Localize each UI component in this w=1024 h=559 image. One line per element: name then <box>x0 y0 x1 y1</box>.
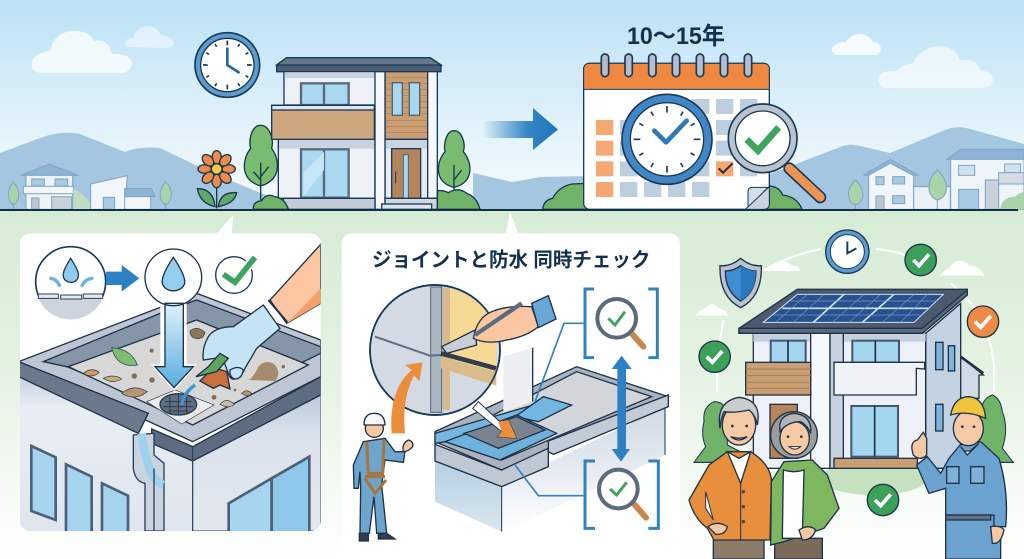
dashed ring <box>717 249 994 490</box>
headline: period: 10〜15年 <box>627 23 725 50</box>
icon: green check <box>216 257 255 293</box>
sky background <box>0 0 1024 211</box>
roof building <box>435 348 668 532</box>
debris on roof <box>83 328 285 407</box>
arrow: detail to roof <box>473 402 517 438</box>
icon: flower <box>197 151 237 208</box>
clouds: upper left <box>32 26 174 73</box>
arm and glove <box>196 244 321 389</box>
building windows <box>31 446 309 535</box>
drain <box>147 385 214 424</box>
magnifier bracket upper <box>585 289 657 358</box>
calendar grid <box>596 120 733 197</box>
arrow: two-way check <box>612 356 632 462</box>
house main <box>272 58 441 209</box>
icon: magnifier <box>728 104 820 197</box>
person: older man <box>689 397 771 559</box>
trees and ground <box>694 395 1014 495</box>
arrow: house to calendar <box>482 108 558 150</box>
person: worker giving thumbs up <box>912 397 1006 559</box>
icon: water shedding circle <box>36 247 106 320</box>
panel: joint and waterproof check <box>342 212 680 559</box>
icon: clock <box>826 230 869 273</box>
calendar <box>584 54 769 209</box>
roof parapet <box>19 293 321 461</box>
icon: tree right <box>438 131 470 197</box>
icon: tree left <box>244 125 277 200</box>
panel: gutter drain cleaning <box>19 215 321 535</box>
check badges <box>699 244 999 516</box>
arrow: blue step <box>106 265 139 292</box>
icon: wall clock <box>195 33 260 97</box>
worker with harness <box>353 413 413 541</box>
icon: clock on calendar <box>622 94 712 184</box>
icon: shield <box>720 258 761 308</box>
calendar rings <box>601 54 752 77</box>
arrow: orange to joint <box>391 362 423 433</box>
person: older woman <box>771 412 839 559</box>
small houses left <box>8 164 171 209</box>
ground line <box>0 209 1018 211</box>
bushes by the house <box>253 190 480 209</box>
small houses right <box>848 149 1024 209</box>
house <box>739 289 983 468</box>
heading: ジョイントと防水 同時チェック <box>372 249 650 272</box>
magnified joint circle <box>370 285 500 415</box>
clouds <box>696 261 985 316</box>
solar panels <box>763 294 943 322</box>
leader lines <box>515 323 583 496</box>
arrow: water down into drain <box>144 248 202 391</box>
hand applying sealant <box>442 296 556 353</box>
bushes by the calendar <box>543 183 802 209</box>
building walls <box>20 377 321 531</box>
mountains <box>0 127 1024 210</box>
downspout <box>133 433 164 531</box>
magnifier bracket lower <box>585 461 658 528</box>
ground background <box>0 210 1024 559</box>
clouds: upper right <box>832 34 993 88</box>
scene: calendar, right <box>543 54 1024 209</box>
scene: wall clock and house, left <box>8 33 480 209</box>
panel: completed home with family and worker <box>689 230 1014 559</box>
